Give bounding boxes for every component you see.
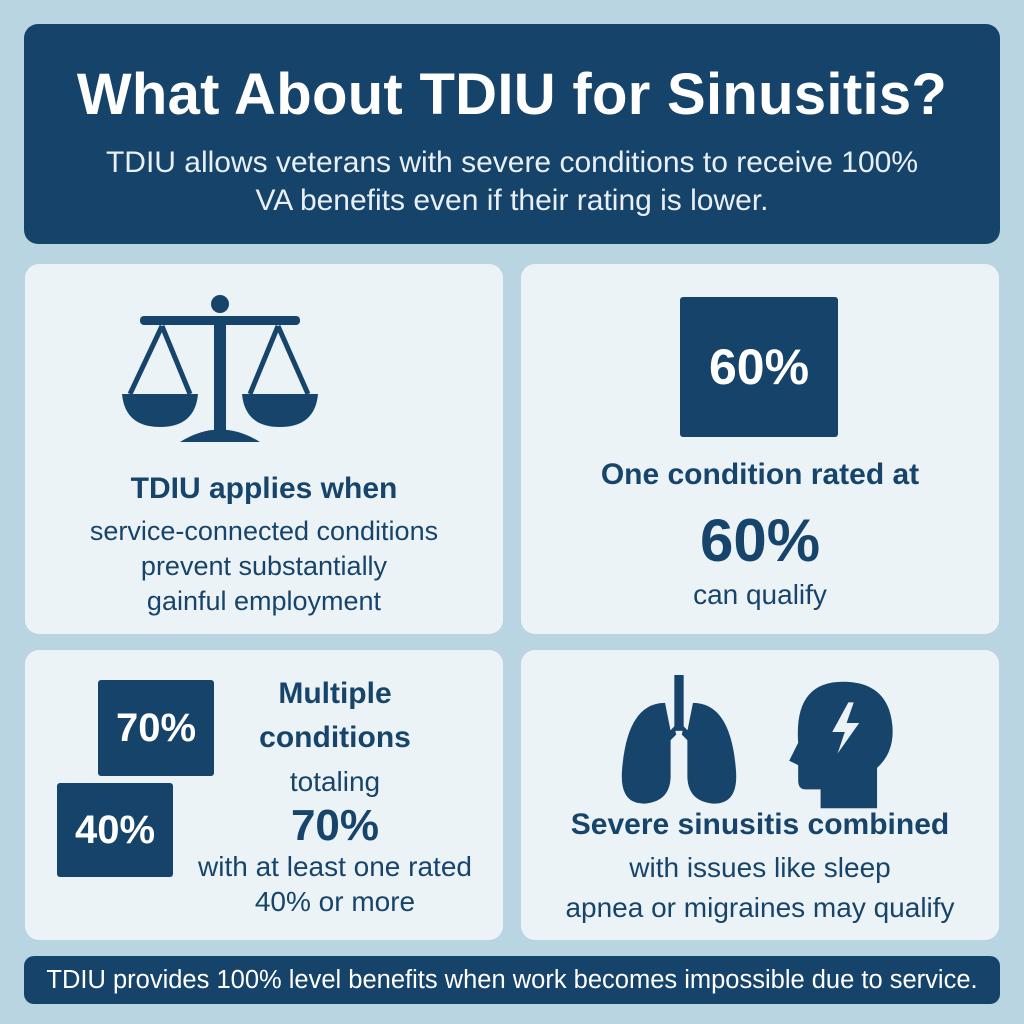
text: totaling bbox=[290, 766, 380, 797]
badge 40% bbox=[57, 783, 173, 877]
panel: 60% bbox=[521, 264, 999, 634]
heading: Severe sinusitis combined bbox=[571, 808, 949, 841]
text: service-connected conditions bbox=[90, 516, 438, 546]
badge 60%: 60% bbox=[709, 339, 809, 395]
text bbox=[90, 516, 438, 616]
text: can qualify bbox=[693, 579, 827, 610]
text bbox=[565, 852, 955, 923]
subtitle bbox=[106, 146, 918, 217]
text: with issues like sleep bbox=[629, 852, 891, 883]
badge 70%: 70% bbox=[116, 706, 196, 750]
text: 40% or more bbox=[255, 886, 415, 917]
heading: TDIU applies when bbox=[131, 472, 397, 505]
icon: lungs bbox=[622, 675, 736, 804]
text: with at least one rated bbox=[198, 851, 472, 882]
icon: scales bbox=[122, 295, 318, 442]
footer bar bbox=[24, 956, 1000, 1004]
panel: TDIU applies bbox=[25, 264, 503, 634]
badge 60% bbox=[680, 297, 838, 437]
panel: sinusitis bbox=[521, 650, 999, 940]
footer bar: TDIU provides 100% level benefits when work becomes impossible due to service. bbox=[46, 966, 978, 994]
text bbox=[198, 677, 472, 917]
text: prevent substantially bbox=[141, 551, 387, 581]
text: conditions bbox=[259, 721, 411, 754]
panel: multiple conditions bbox=[25, 650, 503, 940]
icon: head bbox=[789, 682, 893, 808]
subtitle: TDIU allows veterans with severe conditions to receive 100% bbox=[106, 146, 918, 179]
subtitle: VA benefits even if their rating is lower. bbox=[255, 184, 769, 217]
badge 40%: 40% bbox=[75, 808, 155, 852]
header bbox=[24, 24, 1000, 244]
text: apnea or migraines may qualify bbox=[565, 892, 955, 923]
text: Multiple bbox=[278, 677, 392, 710]
heading: One condition rated at bbox=[601, 458, 919, 491]
title: What About TDIU for Sinusitis? bbox=[77, 62, 947, 127]
badge 70% bbox=[98, 680, 214, 776]
text: gainful employment bbox=[147, 586, 381, 616]
text: 70% bbox=[291, 801, 379, 850]
big number: 60% bbox=[700, 507, 820, 574]
